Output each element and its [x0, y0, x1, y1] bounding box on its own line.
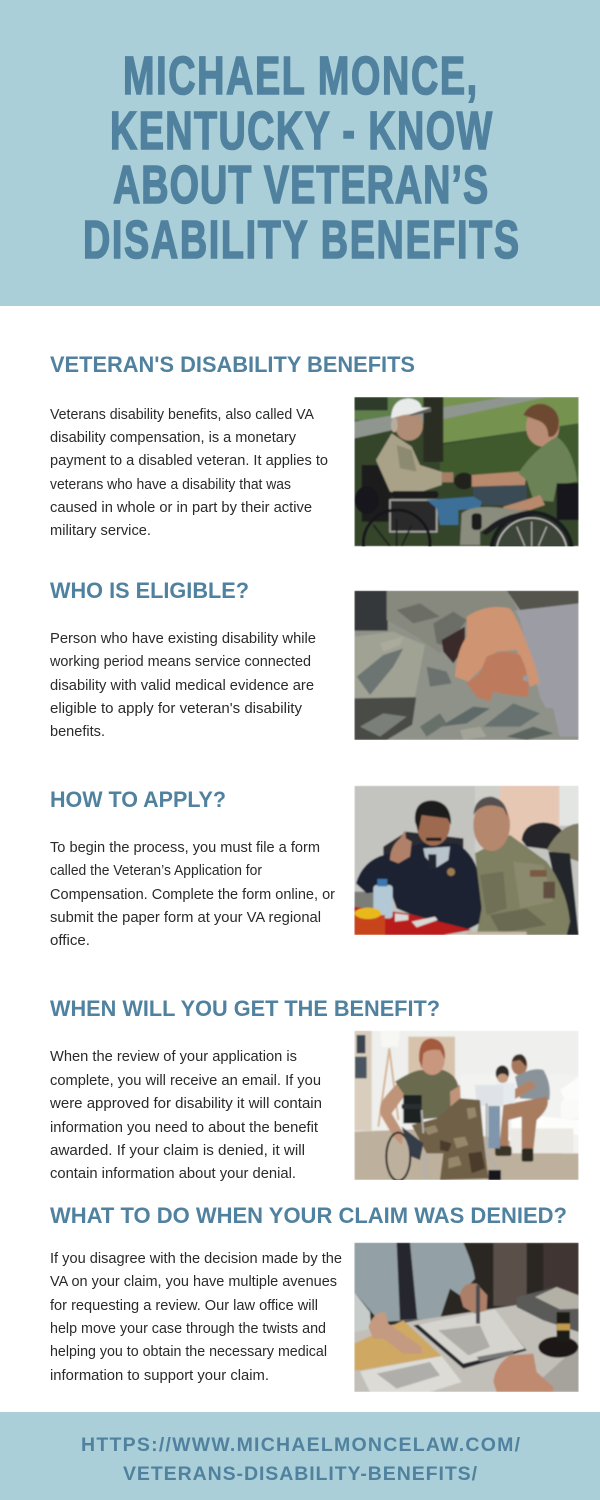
text block: eligibility — [49, 631, 316, 740]
text block: denied claim: If you disagree with the decision made by the — [50, 1251, 342, 1267]
camouflage flecks — [423, 1107, 477, 1168]
hands — [368, 1312, 422, 1354]
text block: benefits description: veterans who have a disability that was — [50, 477, 291, 493]
lawyer shirt and tie — [354, 1243, 475, 1322]
left man's head and cap — [395, 411, 423, 441]
left man's chair — [362, 465, 392, 522]
text block: when benefit arrives: were approved for disability it will contain — [49, 1096, 322, 1112]
heading: who is eligible: WHO IS ELIGIBLE? — [50, 578, 249, 603]
photo: lawyer reviewing document with client — [354, 1243, 579, 1392]
title: ABOUT VETERAN’S — [113, 154, 488, 215]
text block: eligibility: Person who have existing disability while — [50, 631, 316, 647]
text block: denied claim: for requesting a review. Our law office will — [50, 1298, 318, 1314]
header band — [0, 0, 600, 306]
title: DISABILITY BENEFITS — [83, 209, 519, 270]
text block: how to apply: Compensation. Complete the form online, or — [50, 887, 335, 903]
text block: how to apply: called the Veteran’s Application for — [50, 863, 262, 879]
text block: denied claim: help move your case through the twists and — [50, 1321, 326, 1337]
lower document — [360, 1356, 462, 1392]
heading: when will you get the benefit: WHEN WILL YOU GET THE BENEFIT? — [50, 996, 440, 1021]
title: MICHAEL MONCE, — [123, 45, 477, 106]
photo: two officers posing at a table — [354, 786, 579, 935]
text block: benefits description: military service. — [50, 523, 151, 539]
text block: benefits description: payment to a disabled veteran. It applies to — [50, 453, 328, 469]
text block: benefits description: caused in whole or in part by their active — [50, 500, 312, 516]
title: KENTUCKY - KNOW — [110, 100, 492, 161]
handshake — [442, 472, 453, 482]
text block: benefits description: disability compensation, is a monetary — [50, 430, 297, 446]
books — [517, 1287, 579, 1332]
woman — [380, 1080, 405, 1145]
left man's shirt — [376, 433, 443, 495]
sofa — [572, 1138, 578, 1154]
yellow folder — [354, 1320, 442, 1370]
desk — [354, 1299, 579, 1392]
wheelchair — [386, 1133, 410, 1181]
footer link text: HTTPS://WWW.MICHAELMONCELAW.COM/ — [81, 1434, 521, 1456]
text block: denied claim — [50, 1251, 342, 1384]
text block: eligibility: benefits. — [50, 724, 105, 740]
camouflage flecks — [360, 713, 407, 737]
text block: how to apply: office. — [50, 933, 90, 949]
left officer — [356, 843, 483, 930]
table and items — [354, 907, 472, 935]
wheels — [361, 508, 432, 546]
text block: benefits description: Veterans disability benefits, also called VA — [50, 407, 314, 423]
text block: eligibility: eligible to apply for veteran's disability — [50, 701, 303, 717]
text block: how to apply: submit the paper form at your VA regional — [50, 910, 321, 926]
text block: when benefit arrives: complete, you will receive an email. If you — [50, 1073, 321, 1089]
heading: veteran's disability benefits: VETERAN'S DISABILITY BENEFITS — [50, 352, 415, 377]
footer link text — [81, 1434, 521, 1485]
hands — [455, 607, 539, 687]
text block: how to apply: To begin the process, you must file a form — [50, 840, 320, 856]
gavel — [538, 1336, 578, 1358]
footer link text: VETERANS-DISABILITY-BENEFITS/ — [123, 1463, 478, 1485]
text block: when benefit arrives: When the review of your application is — [50, 1049, 297, 1065]
photo: veterans in wheelchairs shaking hands — [354, 397, 579, 546]
man and child — [511, 1055, 527, 1075]
photo: woman in wheelchair with family behind — [354, 1031, 579, 1181]
left man's jeans — [427, 497, 482, 525]
text block: when benefit arrives: contain information about your denial. — [50, 1166, 296, 1182]
right officer — [475, 835, 570, 935]
heading: how to apply: HOW TO APPLY? — [50, 787, 226, 812]
footer band — [0, 1412, 600, 1500]
text block: denied claim: information to support your claim. — [50, 1368, 269, 1384]
text block: how to apply — [50, 840, 335, 949]
text block: when benefit arrives: awarded. If your claim is denied, it will — [50, 1143, 305, 1159]
photo: clasped hands on camouflage uniform — [354, 591, 579, 740]
document on clipboard — [413, 1324, 527, 1370]
right man — [525, 416, 560, 448]
text block: denied claim: helping you to obtain the necessary medical — [50, 1344, 327, 1360]
text block: eligibility: working period means service connected — [49, 654, 311, 670]
text block: when benefit arrives — [49, 1049, 322, 1182]
text block: eligibility: disability with valid medical evidence are — [50, 678, 314, 694]
text block: benefits description — [50, 407, 328, 539]
heading: what to do when denied: WHAT TO DO WHEN YOUR CLAIM WAS DENIED? — [50, 1203, 567, 1228]
text block: when benefit arrives: information you need to about the benefit — [50, 1120, 318, 1136]
text block: denied claim: VA on your claim, you have multiple avenues — [50, 1274, 337, 1290]
title — [83, 45, 519, 270]
